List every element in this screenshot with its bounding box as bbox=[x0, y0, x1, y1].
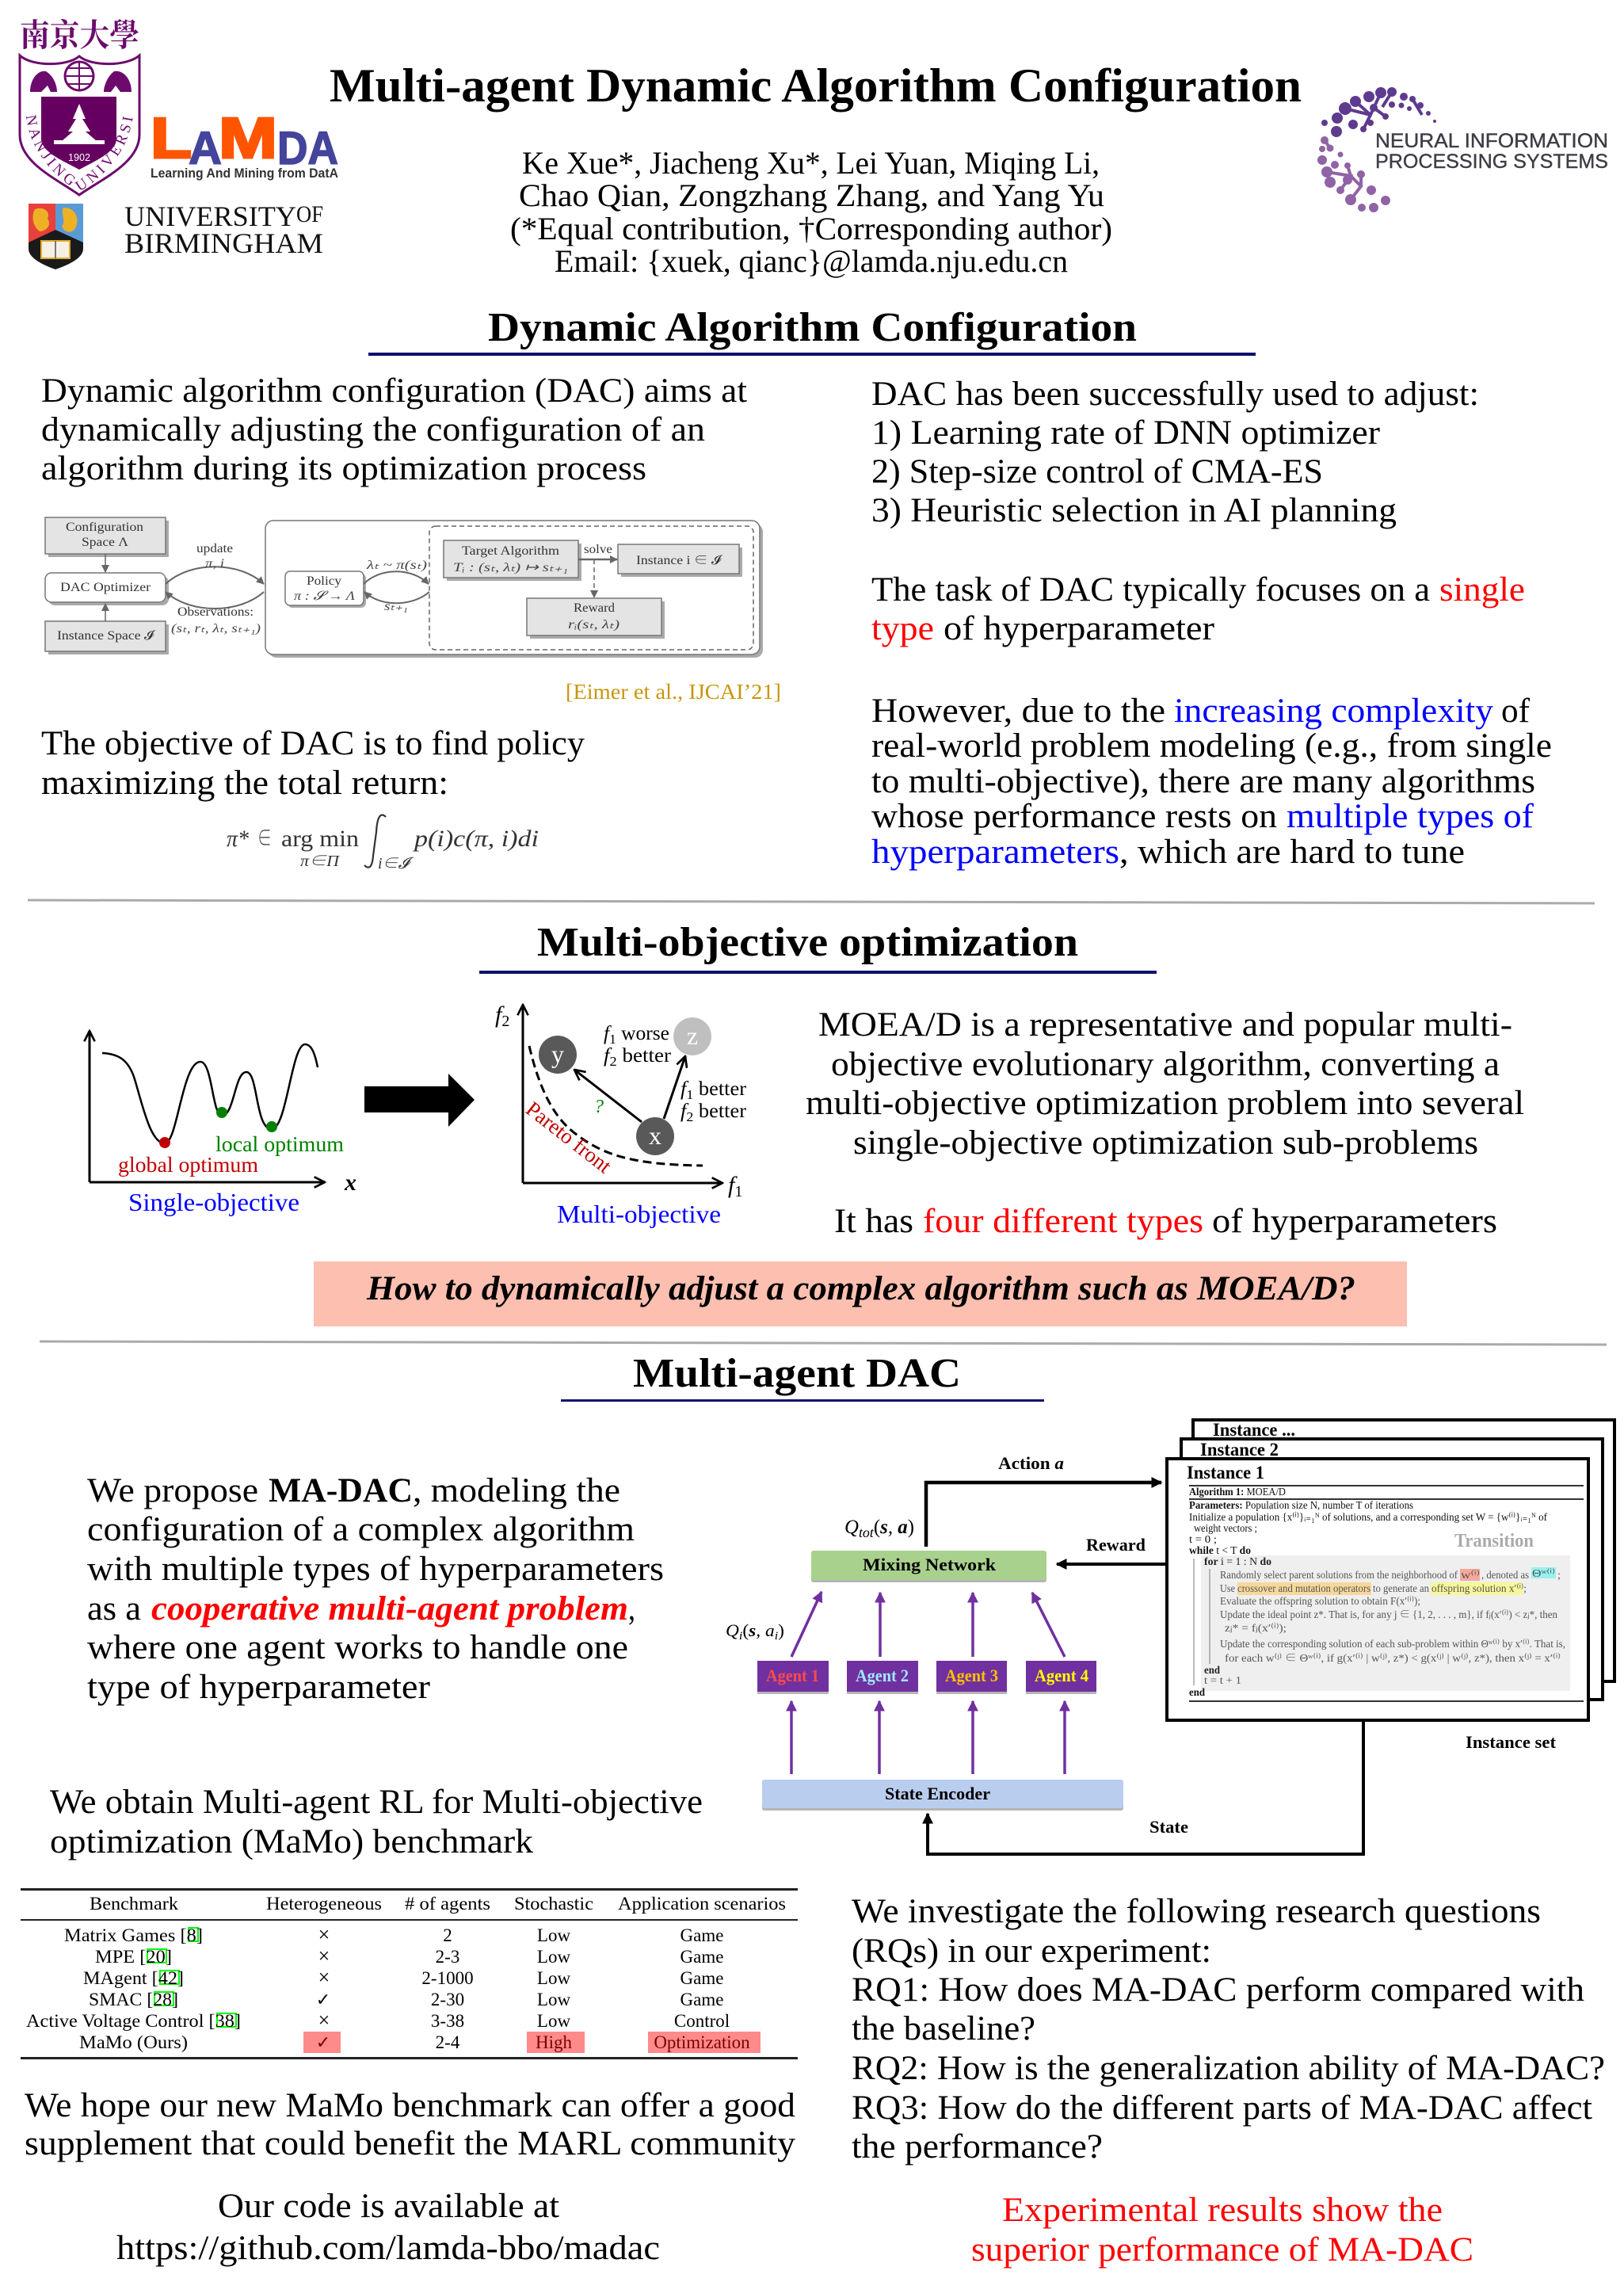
logo: NeurIPS: NEURAL INFORMATION bbox=[1375, 130, 1608, 152]
table: benchmark comparison: Optimization bbox=[654, 2032, 750, 2052]
text: research questions: We investigate the following research questions bbox=[852, 1893, 1541, 1930]
text: increasing complexity: to multi-objective), there are many algorithms bbox=[871, 763, 1535, 800]
heading: Multi-agent DAC bbox=[561, 1351, 1044, 1402]
text: MA-DAC proposal: We propose bbox=[87, 1472, 258, 1509]
diagram: DAC framework: Tᵢ : (sₜ, λₜ) ↦ sₜ₊₁ bbox=[453, 561, 568, 574]
text: DAC applications: DAC has been successfully used to adjust: bbox=[871, 376, 1479, 413]
formula: i∈𝓘 bbox=[378, 855, 414, 872]
text: MA-DAC proposal bbox=[87, 1472, 664, 1706]
table: benchmark comparison: × bbox=[318, 1966, 330, 1989]
algorithm listing: MOEA/D: Evaluate the offspring solution to obtain F(x′⁽ⁱ⁾); bbox=[1220, 1596, 1420, 1608]
table: benchmark comparison: Benchmark bbox=[90, 1894, 179, 1914]
text: experimental conclusion bbox=[971, 2192, 1473, 2269]
heading: Multi-objective optimization: Multi-objective optimization bbox=[537, 920, 1078, 965]
diagram: DAC framework: Reward bbox=[574, 601, 615, 615]
algorithm listing: MOEA/D: Randomly select parent solutions from the neighborhood of bbox=[1220, 1570, 1458, 1582]
algorithm listing: MOEA/D: Update the ideal point z*. That is, for any j ∈ {1, 2, . . . , m}, if fⱼ(x′⁽ⁱ⁾) < zⱼ*, then bbox=[1220, 1609, 1557, 1621]
chart: single-objective landscape bbox=[90, 1031, 356, 1216]
logo: University of Birmingham: OF bbox=[296, 201, 323, 227]
diagram: DAC framework: π, i bbox=[205, 557, 224, 570]
authors: Ke Xue*, Jiacheng Xu*, Lei Yuan, Miqing Li, bbox=[522, 145, 1100, 181]
chart: multi-objective Pareto: y bbox=[551, 1040, 564, 1068]
table: benchmark comparison: × bbox=[318, 2009, 330, 2032]
text: code availability: Our code is available at bbox=[218, 2188, 559, 2225]
text: single type of hyperparameter bbox=[871, 571, 1525, 647]
text: increasing complexity bbox=[871, 693, 1552, 871]
table: benchmark comparison: × bbox=[318, 1923, 330, 1946]
label: instance set: Instance set bbox=[1466, 1732, 1557, 1752]
algorithm listing: MOEA/D: for each w⁽ʲ⁾ ∈ Θʷ⁽ⁱ⁾, if g(x′⁽ⁱ⁾ | w⁽ʲ⁾, z*) < g(x⁽ʲ⁾ | w⁽ʲ⁾, z*), then x⁽ʲ⁾ = x′⁽ⁱ⁾ bbox=[1225, 1653, 1561, 1665]
callout: research question: How to dynamically adjust a complex algorithm such as MOEA/D? bbox=[366, 1270, 1355, 1307]
arrow: action bbox=[926, 1453, 1161, 1547]
algorithm listing: MOEA/D: weight vectors ; bbox=[1194, 1523, 1257, 1535]
text: MOEA/D description: multi-objective optimization problem into several bbox=[806, 1085, 1524, 1122]
instance set stack bbox=[1167, 1420, 1614, 1720]
chart: multi-objective Pareto: f bbox=[680, 1078, 689, 1100]
table: benchmark comparison: Game bbox=[680, 1947, 723, 1967]
agent boxes bbox=[757, 1661, 1096, 1694]
agent boxes: Agent 4 bbox=[1035, 1666, 1088, 1685]
table: benchmark comparison: 2-4 bbox=[436, 2032, 460, 2052]
table: benchmark comparison: 3-38 bbox=[431, 2011, 464, 2031]
label: Q_i: ( bbox=[742, 1620, 749, 1640]
text: objective of DAC: maximizing the total return: bbox=[41, 765, 448, 802]
chart: multi-objective Pareto: 2 bbox=[686, 1109, 693, 1124]
diagram: DAC framework: update bbox=[196, 542, 233, 555]
panel: Multi-objective optimization bbox=[90, 920, 1524, 1326]
text: four types of hyperparameters bbox=[834, 1203, 1497, 1240]
arrow: reward bbox=[1057, 1535, 1167, 1564]
diagram: DAC framework: Instance i ∈ 𝓘 bbox=[636, 554, 722, 567]
algorithm listing: MOEA/D: end bbox=[1204, 1665, 1220, 1677]
panel: Multi-agent DAC bbox=[21, 1351, 1614, 2269]
text: MA-DAC proposal: , bbox=[628, 1590, 635, 1628]
diagram: DAC framework: λₜ ~ π(sₜ) bbox=[366, 559, 427, 572]
text: four types of hyperparameters: It has bbox=[834, 1203, 913, 1240]
table: benchmark comparison: Game bbox=[680, 1990, 723, 2009]
label: Q_i: ) bbox=[778, 1620, 784, 1640]
diagram: DAC framework: (sₜ, rₜ, λₜ, sₜ₊₁) bbox=[171, 622, 261, 635]
table: benchmark comparison: × bbox=[318, 1944, 330, 1967]
mixing network: Mixing Network bbox=[863, 1555, 997, 1574]
text: research questions: (RQs) in our experiment: bbox=[852, 1933, 1211, 1970]
logo: LAMDA: DA bbox=[277, 123, 338, 174]
chart: multi-objective Pareto: better bbox=[693, 1101, 747, 1122]
table: benchmark comparison: Low bbox=[537, 1925, 570, 1945]
table: benchmark comparison: Stochastic bbox=[514, 1894, 593, 1914]
text: single type of hyperparameter: single bbox=[1439, 571, 1525, 609]
chart: multi-objective Pareto: Pareto front bbox=[521, 1097, 616, 1178]
diagram: DAC framework: solve bbox=[584, 543, 612, 556]
label: Q_tot: s, a) bbox=[880, 1517, 914, 1538]
text: MA-DAC proposal: where one agent works to handle one bbox=[87, 1629, 628, 1666]
algorithm listing: MOEA/D: Parameters: Population size N, number T of iterations bbox=[1189, 1500, 1413, 1512]
label: Q_i: i bbox=[739, 1630, 742, 1643]
algorithm listing: MOEA/D: w⁽ⁱ⁾ bbox=[1461, 1570, 1480, 1582]
label: Q_i: Q bbox=[726, 1620, 738, 1640]
logo: LAMDA: M bbox=[219, 107, 277, 170]
label: Q_tot: Q bbox=[844, 1517, 859, 1538]
algorithm listing: MOEA/D: to generate an bbox=[1373, 1583, 1429, 1595]
text: MA-DAC proposal: as a bbox=[87, 1590, 141, 1628]
diagram: DAC framework: rᵢ(sₜ, λₜ) bbox=[568, 618, 619, 632]
chart: multi-objective Pareto: f bbox=[604, 1023, 612, 1044]
formula: π∈Π bbox=[300, 853, 341, 870]
table: benchmark comparison: Low bbox=[537, 1947, 570, 1967]
algorithm listing: MOEA/D: Θʷ⁽ⁱ⁾ bbox=[1532, 1568, 1555, 1580]
text: research questions: RQ2: How is the generalization ability of MA-DAC? bbox=[852, 2050, 1605, 2087]
chart: multi-objective Pareto: 1 bbox=[609, 1032, 616, 1047]
arrow: state bbox=[928, 1721, 1363, 1854]
label: Q_tot: ( bbox=[874, 1517, 880, 1538]
table: benchmark comparison: Active Voltage Control [38] bbox=[26, 2011, 241, 2031]
authors: (*Equal contribution, †Corresponding author) bbox=[510, 211, 1112, 246]
text: MA-DAC proposal: with multiple types of hyperparameters bbox=[87, 1551, 664, 1588]
algorithm listing: MOEA/D: t = 0 ; bbox=[1189, 1534, 1217, 1546]
text: increasing complexity: hyperparameters bbox=[871, 834, 1119, 871]
algorithm listing: MOEA/D: Initialize a population {x⁽ⁱ⁾}ᵢ₌₁ᴺ of solutions, and a corresponding set W = {w⁽ⁱ⁾}ᵢ₌₁ᴺ of bbox=[1189, 1512, 1547, 1524]
label: Q_i: s, a bbox=[749, 1620, 773, 1640]
text: DAC definition: algorithm during its optimization process bbox=[41, 450, 646, 487]
arrow: action: Action a bbox=[998, 1453, 1064, 1473]
formula: arg min bbox=[281, 826, 359, 852]
table: benchmark comparison: ✓ bbox=[316, 1990, 330, 2010]
citation: [Eimer et al., IJCAI’21] bbox=[566, 680, 781, 704]
diagram: DAC framework bbox=[45, 517, 763, 658]
text: single type of hyperparameter: type bbox=[871, 610, 934, 647]
table: benchmark comparison: Application scenarios bbox=[618, 1894, 786, 1914]
panel: Dynamic Algorithm Configuration bbox=[41, 305, 1552, 872]
text: MOEA/D description: objective evolutionary algorithm, converting a bbox=[831, 1046, 1500, 1083]
algorithm listing: MOEA/D: Algorithm 1: MOEA/D bbox=[1189, 1486, 1286, 1498]
arrows: state encoder to agents bbox=[791, 1701, 1065, 1774]
label: Q_tot: tot bbox=[859, 1525, 875, 1540]
table: benchmark comparison: 2-3 bbox=[436, 1947, 459, 1967]
chart: multi-objective Pareto: f bbox=[495, 1002, 505, 1028]
instance set stack: Instance 1 bbox=[1187, 1463, 1264, 1483]
chart: single-objective landscape: global optimum bbox=[118, 1153, 258, 1177]
text: DAC definition: dynamically adjusting the configuration of an bbox=[41, 411, 705, 448]
logo: NeurIPS: PROCESSING SYSTEMS bbox=[1375, 151, 1608, 173]
logo: LAMDA bbox=[151, 107, 338, 181]
logo: University of Birmingham: UNIVERSITY bbox=[124, 200, 296, 232]
text: DAC applications: 3) Heuristic selection in AI planning bbox=[871, 492, 1397, 529]
text: research questions bbox=[852, 1893, 1605, 2166]
table: benchmark comparison: MPE [20] bbox=[95, 1947, 172, 1967]
logo: University of Birmingham bbox=[29, 200, 323, 269]
algorithm listing: MOEA/D: t = t + 1 bbox=[1204, 1675, 1241, 1687]
mixing network bbox=[811, 1551, 1046, 1582]
heading: Dynamic Algorithm Configuration: Dynamic Algorithm Configuration bbox=[488, 305, 1137, 350]
header: logos, title and authors bbox=[19, 10, 1608, 279]
chart: multi-objective Pareto: ? bbox=[594, 1097, 604, 1117]
algorithm listing: MOEA/D: crossover and mutation operators bbox=[1237, 1583, 1370, 1595]
chart: multi-objective Pareto: f bbox=[604, 1045, 612, 1067]
arrow: reward: Reward bbox=[1086, 1535, 1146, 1555]
table: benchmark comparison bbox=[21, 1888, 798, 2059]
diagram: DAC framework: Configuration bbox=[66, 521, 143, 534]
label: Q_i: i bbox=[775, 1630, 778, 1643]
heading: Multi-objective optimization bbox=[479, 920, 1157, 974]
chart: multi-objective Pareto: worse bbox=[616, 1023, 669, 1044]
table: benchmark comparison: ✓ bbox=[316, 2033, 330, 2053]
text: increasing complexity: , which are hard to tune bbox=[1119, 834, 1465, 871]
table: benchmark comparison: Low bbox=[537, 1990, 570, 2009]
text: objective of DAC bbox=[41, 725, 585, 802]
text: research questions: RQ3: How do the different parts of MA-DAC affect bbox=[852, 2089, 1592, 2127]
table: benchmark comparison: High bbox=[536, 2032, 572, 2052]
formula: p(i)c(π, i)di bbox=[413, 826, 539, 852]
text: experimental conclusion: Experimental results show the bbox=[1002, 2192, 1443, 2229]
arrows: agents to mixing network bbox=[791, 1592, 1065, 1657]
table: benchmark comparison: # of agents bbox=[405, 1894, 490, 1914]
table: benchmark comparison: Low bbox=[537, 1968, 570, 1988]
heading: Dynamic Algorithm Configuration bbox=[368, 305, 1256, 356]
text: MaMo benchmark: optimization (MaMo) benchmark bbox=[50, 1823, 534, 1860]
heading: Multi-agent DAC: Multi-agent DAC bbox=[633, 1351, 961, 1396]
text: objective of DAC: The objective of DAC is to find policy bbox=[41, 725, 585, 762]
table: benchmark comparison: Matrix Games [8] bbox=[64, 1925, 203, 1945]
text: increasing complexity: However, due to the bbox=[871, 693, 1165, 730]
chart: multi-objective Pareto: better bbox=[617, 1045, 672, 1067]
diagram: DAC framework: sₜ₊₁ bbox=[384, 600, 408, 613]
state encoder bbox=[762, 1780, 1123, 1811]
text: increasing complexity: increasing complexity bbox=[1174, 693, 1494, 730]
authors: Chao Qian, Zongzhang Zhang, and Yang Yu bbox=[519, 177, 1104, 213]
logo: NeurIPS bbox=[1317, 87, 1608, 212]
text: MaMo benchmark: We obtain Multi-agent RL for Multi-objective bbox=[50, 1784, 703, 1821]
chart: multi-objective Pareto: z bbox=[687, 1021, 698, 1050]
table: benchmark comparison: SMAC [28] bbox=[89, 1990, 178, 2009]
text: DAC applications: 2) Step-size control of CMA-ES bbox=[871, 453, 1323, 490]
text: increasing complexity: real-world problem modeling (e.g., from single bbox=[871, 727, 1552, 765]
text: hope for MARL community: We hope our new MaMo benchmark can offer a good bbox=[25, 2087, 795, 2124]
algorithm listing: MOEA/D: while t < T do bbox=[1189, 1545, 1251, 1557]
chart: single-objective landscape: Single-objective bbox=[128, 1188, 299, 1216]
text: increasing complexity: multiple types of bbox=[1287, 798, 1534, 835]
text: MA-DAC proposal: type of hyperparameter bbox=[87, 1669, 430, 1706]
table: benchmark comparison: Heterogeneous bbox=[266, 1894, 382, 1914]
text: MOEA/D description bbox=[806, 1006, 1524, 1162]
text: DAC applications: 1) Learning rate of DNN optimizer bbox=[871, 414, 1380, 452]
algorithm listing: MOEA/D: Update the corresponding solution of each sub-problem within Θʷ⁽ⁱ⁾ by x′⁽ⁱ⁾. That is, bbox=[1220, 1639, 1565, 1650]
logo: LAMDA: A bbox=[189, 123, 222, 174]
text: MOEA/D description: MOEA/D is a representative and popular multi- bbox=[818, 1006, 1512, 1044]
callout: research question bbox=[314, 1261, 1407, 1326]
table: benchmark comparison: Game bbox=[680, 1925, 723, 1945]
instance set stack: Instance 2 bbox=[1200, 1440, 1279, 1460]
chart: multi-objective Pareto: 1 bbox=[734, 1183, 742, 1200]
text: MA-DAC proposal: MA-DAC bbox=[269, 1472, 413, 1509]
table: benchmark comparison: Low bbox=[537, 2011, 570, 2031]
algorithm listing: MOEA/D: end bbox=[1189, 1687, 1205, 1699]
logo: Nanjing University: 1902 bbox=[68, 151, 90, 163]
diagram: DAC framework: Instance Space 𝓘 bbox=[57, 629, 155, 643]
logo: Nanjing University: 南京大學 bbox=[20, 10, 139, 55]
diagram: DAC framework: π : 𝓢 → Λ bbox=[294, 590, 355, 603]
diagram: DAC framework: Observations: bbox=[177, 605, 254, 619]
text: code availability: https://github.com/lamda-bbo/madac bbox=[116, 2230, 660, 2267]
title: Multi-agent Dynamic Algorithm Configuration bbox=[330, 59, 1302, 112]
text: research questions: the performance? bbox=[852, 2128, 1103, 2166]
text: MOEA/D description: single-objective optimization sub-problems bbox=[853, 1124, 1478, 1162]
text: four types of hyperparameters: four different types bbox=[923, 1203, 1203, 1240]
agent boxes: Agent 3 bbox=[945, 1666, 998, 1685]
text: MaMo benchmark bbox=[50, 1784, 703, 1860]
text: DAC definition: Dynamic algorithm configuration (DAC) aims at bbox=[41, 372, 747, 410]
chart: single-objective landscape: x bbox=[344, 1170, 356, 1196]
formula: π* bbox=[227, 826, 249, 852]
agent boxes: Agent 1 bbox=[766, 1666, 819, 1685]
arrow: single to multi bbox=[364, 1074, 475, 1127]
text: DAC applications bbox=[871, 376, 1479, 529]
text: MA-DAC proposal: , modeling the bbox=[413, 1472, 620, 1509]
diagram: MA-DAC architecture bbox=[726, 1420, 1614, 1854]
table: benchmark comparison: Game bbox=[680, 1968, 723, 1988]
diagram: DAC framework: Target Algorithm bbox=[462, 544, 560, 558]
table: benchmark comparison: MaMo (Ours) bbox=[79, 2032, 188, 2052]
chart: multi-objective Pareto: f bbox=[728, 1172, 738, 1198]
text: single type of hyperparameter: The task of DAC typically focuses on a bbox=[871, 571, 1430, 609]
table: benchmark comparison: 2-1000 bbox=[421, 1968, 474, 1988]
text: research questions: the baseline? bbox=[852, 2010, 1035, 2047]
state encoder: State Encoder bbox=[885, 1784, 990, 1803]
formula: ∈ bbox=[257, 826, 272, 852]
algorithm listing: MOEA/D: offspring solution x′⁽ⁱ⁾; bbox=[1431, 1583, 1527, 1595]
text: increasing complexity: whose performance rests on bbox=[871, 798, 1277, 835]
text: hope for MARL community: supplement that could benefit the MARL community bbox=[25, 2125, 796, 2162]
chart: multi-objective Pareto: x bbox=[649, 1121, 661, 1150]
chart: multi-objective Pareto: 2 bbox=[610, 1054, 617, 1069]
text: single type of hyperparameter: of hyperparameter bbox=[944, 610, 1214, 647]
table: benchmark comparison: 2 bbox=[443, 1925, 452, 1945]
arrow: state: State bbox=[1149, 1817, 1188, 1837]
table: benchmark comparison: 2-30 bbox=[431, 1990, 464, 2009]
algorithm listing: MOEA/D: , denoted as bbox=[1481, 1570, 1529, 1582]
text: increasing complexity: of bbox=[1501, 693, 1531, 730]
formula bbox=[227, 815, 539, 872]
algorithm listing: MOEA/D: for i = 1 : N do bbox=[1204, 1556, 1271, 1568]
agent boxes: Agent 2 bbox=[856, 1666, 909, 1685]
text: MA-DAC proposal: configuration of a complex algorithm bbox=[87, 1511, 635, 1548]
chart: multi-objective Pareto: 1 bbox=[686, 1087, 693, 1102]
instance set stack: Instance ... bbox=[1213, 1420, 1295, 1440]
text: DAC definition bbox=[41, 372, 747, 487]
logo: LAMDA: L bbox=[151, 107, 192, 170]
algorithm listing: MOEA/D: zⱼ* = fⱼ(x′⁽ⁱ⁾); bbox=[1225, 1623, 1287, 1635]
diagram: DAC framework: Policy bbox=[307, 574, 341, 588]
chart: multi-objective Pareto: better bbox=[693, 1078, 747, 1100]
logo: University of Birmingham: BIRMINGHAM bbox=[124, 227, 323, 259]
chart: multi-objective Pareto: f bbox=[680, 1101, 689, 1122]
algorithm listing: MOEA/D: ; bbox=[1557, 1570, 1561, 1582]
chart: multi-objective Pareto: 2 bbox=[501, 1013, 509, 1030]
table: benchmark comparison: MAgent [42] bbox=[83, 1968, 184, 1988]
logo: LAMDA: Learning And Mining from DatA bbox=[151, 166, 338, 181]
text: code availability bbox=[116, 2188, 660, 2267]
text: MA-DAC proposal: cooperative multi-agent problem bbox=[151, 1590, 628, 1628]
chart: multi-objective Pareto bbox=[495, 1002, 747, 1228]
text: four types of hyperparameters: of hyperparameters bbox=[1212, 1203, 1497, 1240]
algorithm listing: MOEA/D: Transition bbox=[1454, 1531, 1534, 1551]
algorithm listing: MOEA/D bbox=[1189, 1485, 1584, 1702]
text: hope for MARL community bbox=[25, 2087, 796, 2162]
chart: multi-objective Pareto: Multi-objective bbox=[557, 1200, 721, 1228]
table: benchmark comparison: Control bbox=[674, 2011, 730, 2031]
chart: single-objective landscape: local optimum bbox=[215, 1132, 344, 1156]
text: research questions: RQ1: How does MA-DAC perform compared with bbox=[852, 1971, 1584, 2009]
authors: Email: {xuek, qianc}@lamda.nju.edu.cn bbox=[555, 243, 1068, 279]
diagram: DAC framework: DAC Optimizer bbox=[60, 581, 151, 594]
diagram: DAC framework: Space Λ bbox=[82, 536, 128, 549]
authors bbox=[510, 145, 1112, 279]
text: experimental conclusion: superior performance of MA-DAC bbox=[971, 2231, 1473, 2269]
algorithm listing: MOEA/D: Use bbox=[1220, 1583, 1235, 1595]
